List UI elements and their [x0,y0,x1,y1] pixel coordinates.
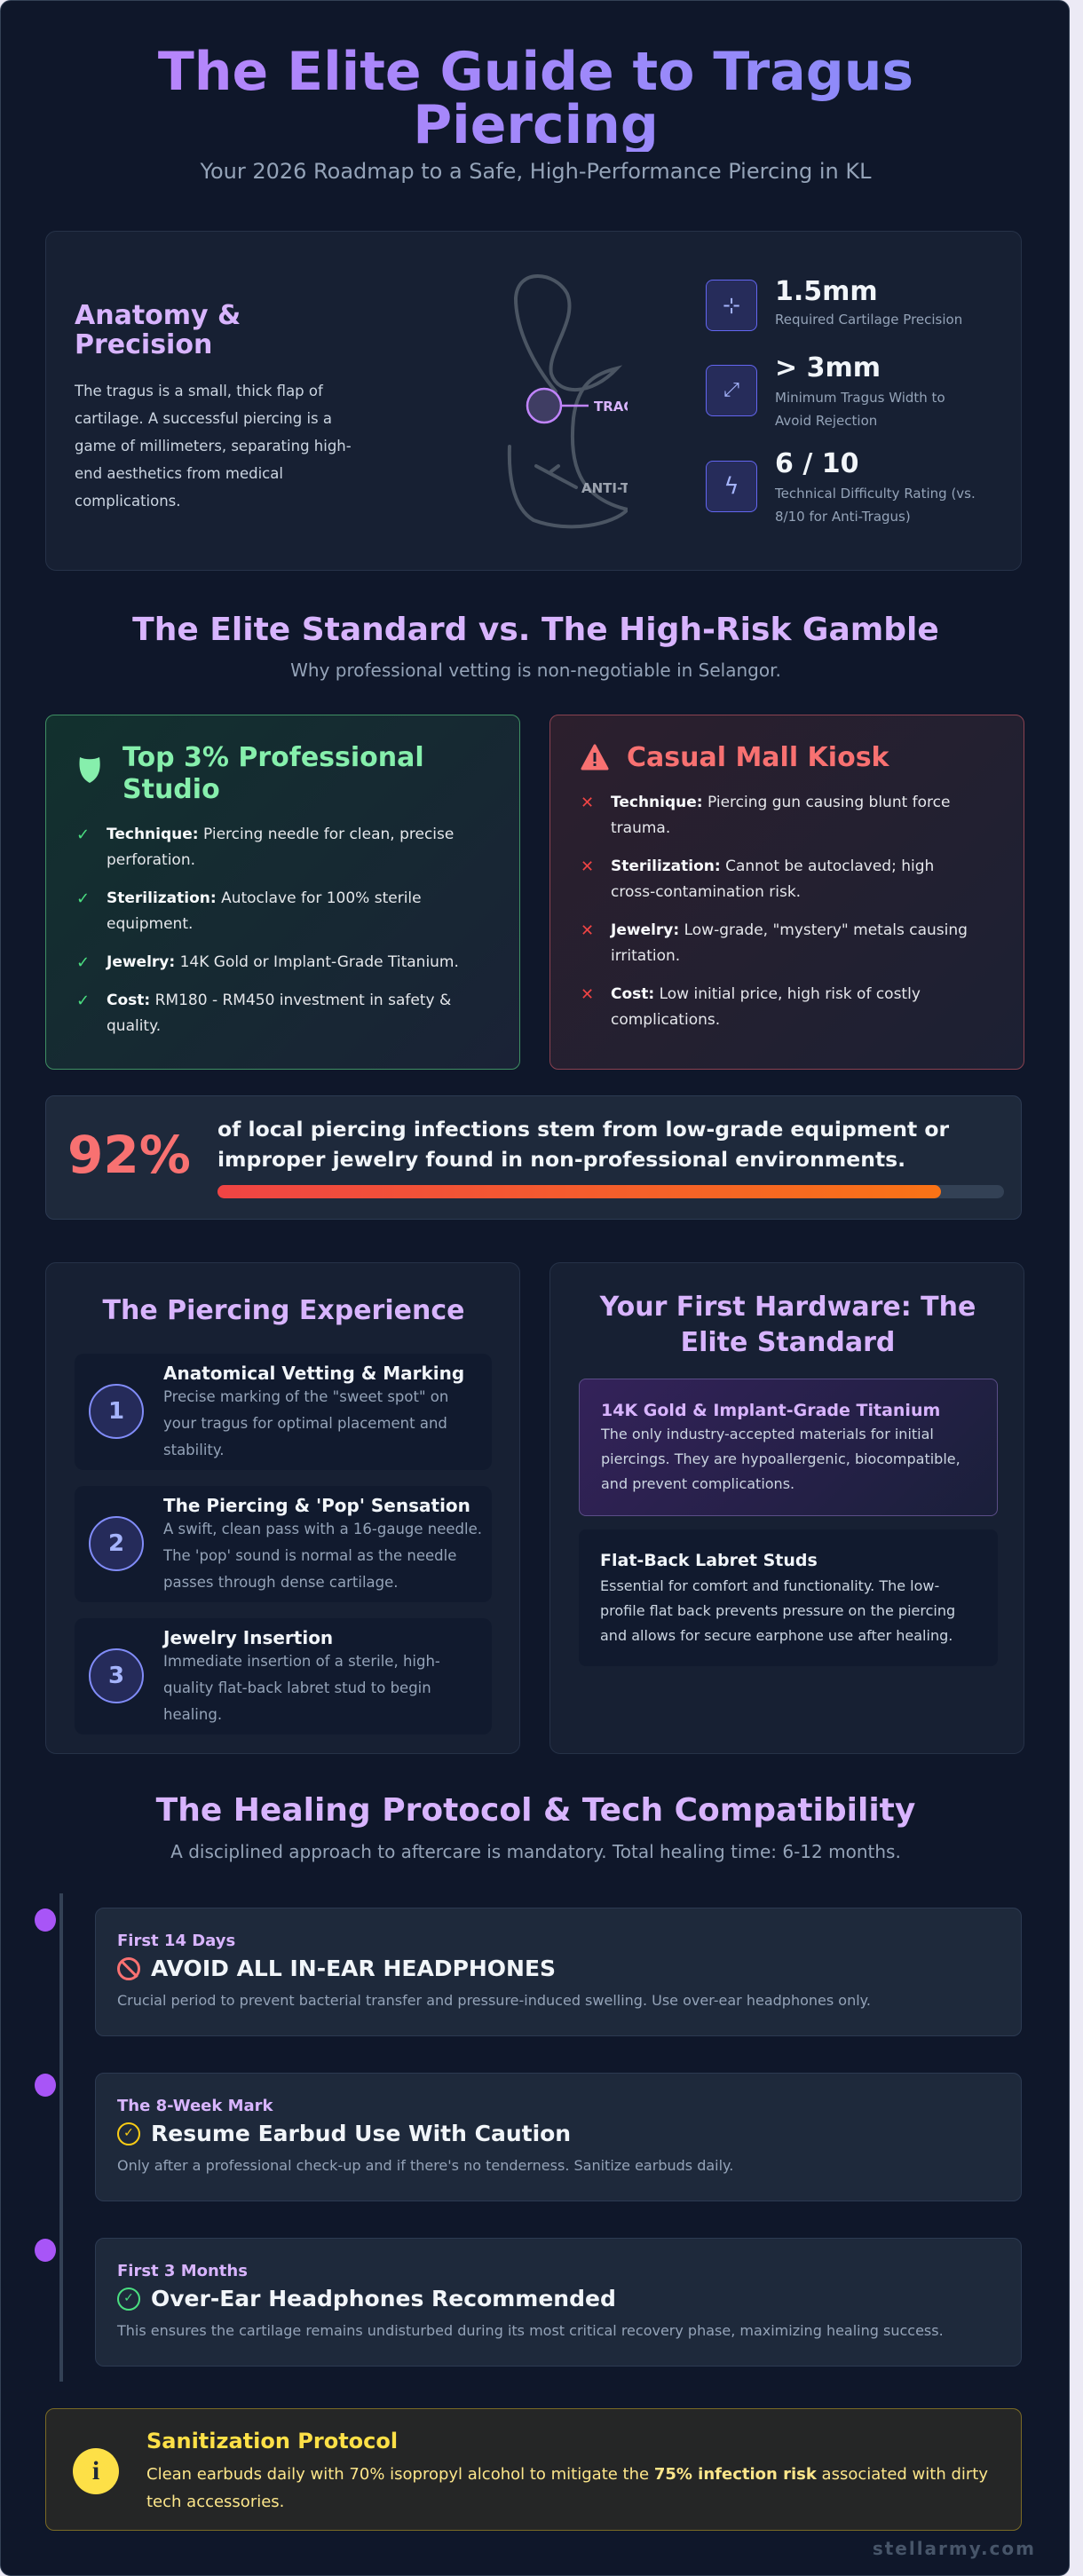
subtitle: vetting: Why professional vetting is non-negotiable in Selangor. [290,660,781,681]
panel: mall kiosk: Technique: Piercing gun causing blunt force trauma. [611,794,950,837]
timeline: first 14 days [95,1908,1022,2036]
panel: professional studio: Cost: RM180 - RM450 investment in safety & quality. [107,992,451,1035]
panel: professional studio: Sterilization: Autoclave for 100% sterile equipment. [107,889,422,933]
timeline: first 3 months: This ensures the cartilage remains undisturbed during its most critical recovery phase, maximizing healing success. [117,2322,944,2339]
step 1 [75,1354,492,1470]
panel: professional studio: ✓ [76,889,90,908]
callout: sanitization: Sanitization Protocol [146,2429,398,2454]
timeline: 8-week mark [95,2073,1022,2201]
timeline: 8-week mark: Resume Earbud Use With Caution [151,2121,571,2146]
panel: professional studio: ✓ [76,826,90,844]
timeline: first 14 days: Crucial period to prevent bacterial transfer and pressure-induced swelling. Use over-ear headphones only. [117,1992,871,2009]
panel: professional studio [45,715,520,1070]
heading: Elite Standard [681,1327,895,1358]
heading: anatomy [75,300,241,360]
title: Piercing [413,94,659,156]
timeline: first 3 months: First 3 Months [117,2262,248,2280]
panel: mall kiosk: ✕ [581,921,594,940]
stat: 6/10: 8/10 for Anti-Tragus) [775,509,911,525]
stat: >3mm [706,352,945,429]
timeline: first 14 days: First 14 Days [117,1932,235,1950]
heading: anatomy: Anatomy & [75,300,241,331]
panel: professional studio: ✓ [76,992,90,1010]
step 3: Immediate insertion of a sterile, high-quality flat-back labret stud to begin healing. [163,1653,440,1723]
panel: mall kiosk: ✕ [581,857,594,876]
icon: info [73,2448,119,2494]
icon: focus [706,280,757,331]
stat: 1.5mm: Required Cartilage Precision [775,312,962,328]
panel: first hardware [549,1262,1024,1754]
heading: professional: Top 3% Professional Studio [123,742,424,805]
stat panel: 92% [45,1095,1022,1220]
icon: info: i [92,2456,99,2485]
panel: professional studio: Jewelry: 14K Gold or Implant-Grade Titanium. [107,953,459,971]
timeline: 8-week mark: Only after a professional check-up and if there's no tenderness. Sanitize earbuds daily. [117,2157,733,2174]
step 2: The Piercing & 'Pop' Sensation [163,1495,470,1516]
heading: anatomy: Precision [75,329,212,360]
callout: sanitization [45,2408,1022,2531]
timeline: 8-week mark: The 8-Week Mark [117,2097,273,2115]
subtitle: healing: A disciplined approach to aftercare is mandatory. Total healing time: 6-12 months. [170,1841,901,1862]
panel: mall kiosk [549,715,1024,1070]
step 2: 2 [108,1530,124,1557]
icon: expand [706,365,757,416]
panel: mall kiosk: Cost: Low initial price, high risk of costly complications. [611,985,921,1029]
subtitle: Your 2026 Roadmap to a Safe, High-Performance Piercing in KL [200,159,872,184]
callout: sanitization: Clean earbuds daily with 70% isopropyl alcohol to mitigate the 75% infection risk associated with dirty tech accessories. [146,2465,988,2511]
panel: anatomy [45,231,1022,571]
step 3: 3 [108,1663,124,1689]
stat: >3mm: Minimum Tragus Width to [775,390,945,406]
stat: 6/10 [706,448,976,525]
stat: >3mm: > 3mm [775,352,881,383]
box: gold titanium: 14K Gold & Implant-Grade Titanium [601,1401,940,1420]
timeline: first 3 months [95,2238,1022,2367]
title: The Elite Guide to Tragus [158,41,913,103]
step 1: 1 [108,1398,124,1425]
icon: expand: ⤢ [723,379,739,401]
stat: 1.5mm: 1.5mm [775,276,878,307]
stat: 6/10: Technical Difficulty Rating (vs. [775,486,976,502]
panel: piercing experience [45,1262,520,1754]
icon: focus: ⊹ [723,293,740,318]
step 2 [75,1486,492,1602]
step 1: Anatomical Vetting & Marking [163,1363,464,1384]
icon: ear diagram [508,274,631,529]
heading: Your First Hardware: The [600,1292,976,1323]
icon: lightning [706,461,757,512]
panel: mall kiosk: Sterilization: Cannot be autoclaved; high cross‑contamination risk. [611,857,934,901]
panel: mall kiosk: ✕ [581,985,594,1004]
panel: professional studio: ✓ [76,953,90,972]
big number: 92% [67,1125,191,1185]
title [1,45,1071,152]
timeline: first 14 days: AVOID ALL IN-EAR HEADPHONES [151,1956,556,1981]
heading: The Piercing Experience [103,1295,464,1326]
heading: healing protocol: The Healing Protocol & Tech Compatibility [156,1792,915,1829]
step 1: Precise marking of the "sweet spot" on your tragus for optimal placement and stability. [163,1388,448,1458]
timeline: 8-week mark: ✓ [123,2125,134,2139]
timeline: first 3 months: ✓ [123,2290,134,2304]
box: gold titanium: The only industry-accepted materials for initial piercings. They are hypoallergenic, biocompatible, and prevent complications. [601,1426,960,1492]
box: gold titanium [579,1379,998,1516]
icon: lightning: ϟ [723,473,739,500]
heading [599,1292,976,1358]
panel: professional studio: Technique: Piercing needle for clean, precise perforation. [107,826,454,869]
stat: >3mm: Avoid Rejection [775,413,877,429]
stat: 6/10: 6 / 10 [775,448,858,479]
text: anatomy description: The tragus is a small, thick flap of cartilage. A successful piercing is a game of millimeters, separating high-end aesthetics from medical complications. [75,383,352,510]
stat: 1.5mm [706,276,962,331]
progress bar [217,1185,1004,1198]
box: flat-back studs [579,1529,998,1666]
footer: brand: stellarmy.com [873,2538,1036,2559]
step 3: Jewelry Insertion [163,1627,333,1648]
step 3 [75,1618,492,1734]
statement: of local piercing infections stem from low-grade equipment or improper jewelry found in non-professional environments. [217,1117,949,1172]
heading: kiosk: Casual Mall Kiosk [627,742,889,773]
box: flat-back studs: Flat-Back Labret Studs [600,1551,818,1570]
heading: elite vs high-risk: The Elite Standard vs. The High-Risk Gamble [132,612,939,648]
panel: mall kiosk: Jewelry: Low-grade, "mystery" metals causing irritation. [611,921,968,965]
timeline: first 3 months: Over-Ear Headphones Recommended [151,2286,616,2311]
step 2: A swift, clean pass with a 16-gauge needle. The 'pop' sound is normal as the needle passes through dense cartilage. [163,1521,482,1591]
box: flat-back studs: Essential for comfort and functionality. The low-profile flat back prevents pressure on the piercing and allows for secure earphone use after healing. [600,1577,955,1644]
panel: mall kiosk: ✕ [581,794,594,812]
